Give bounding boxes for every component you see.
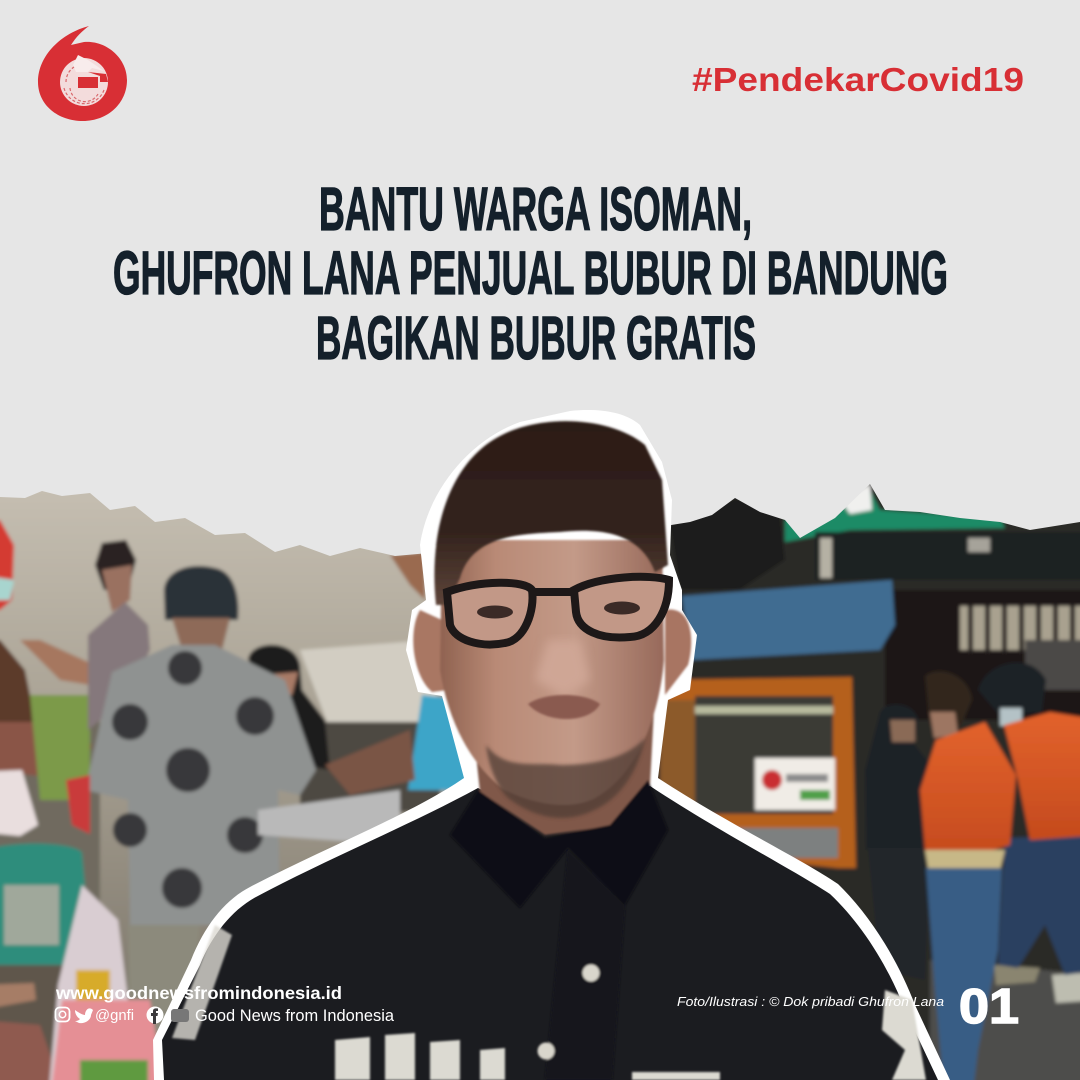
wall highlight bbox=[300, 640, 440, 730]
photo credit: Foto/Ilustrasi : © Dok pribadi Ghufron Lana bbox=[677, 994, 944, 1009]
title: BANTU WARGA ISOMAN, bbox=[319, 175, 752, 243]
icon: youtube bbox=[171, 1009, 189, 1022]
driver 1 jeans bbox=[926, 868, 1002, 1080]
icon: facebook bbox=[146, 1006, 164, 1024]
blue tarp on cart bbox=[682, 580, 895, 660]
lower cart panel bbox=[700, 828, 838, 858]
dark roof bbox=[815, 532, 1080, 580]
icon: twitter bbox=[75, 1008, 93, 1023]
lower left ground and feet bbox=[0, 964, 62, 1054]
face bbox=[440, 540, 664, 805]
icon: instagram bbox=[56, 1008, 70, 1022]
page number: 01 bbox=[959, 980, 1019, 1034]
shirt print bbox=[172, 925, 926, 1080]
social handle: @gnfi bbox=[95, 1007, 134, 1024]
detailed head and body shading bbox=[172, 540, 926, 1080]
driver 2 jeans bbox=[998, 835, 1080, 975]
hashtag: #PendekarCovid19 bbox=[692, 62, 1024, 99]
neck bbox=[470, 690, 655, 835]
shirt bbox=[162, 786, 938, 1080]
man in patterned shirt bbox=[164, 566, 238, 620]
social icons and handles bbox=[56, 1006, 395, 1025]
ears bbox=[413, 610, 448, 692]
portrait: man with glasses bbox=[153, 410, 950, 1080]
dark foliage bbox=[670, 498, 785, 590]
ground bbox=[930, 960, 1080, 1080]
photo: food cart and delivery drivers (right) bbox=[640, 480, 1080, 1080]
green stool bbox=[0, 843, 85, 965]
beard bbox=[486, 738, 645, 818]
website URL: www.goodnewsfromindonesia.id bbox=[55, 983, 342, 1003]
logo: GNFI red swirl emblem bbox=[38, 26, 127, 121]
title bbox=[113, 175, 948, 372]
seated man bbox=[866, 704, 926, 848]
blue shirt person near portrait bbox=[408, 695, 470, 790]
photo: food distribution crowd (left) bbox=[0, 480, 480, 1080]
plastic bag of rice bbox=[46, 882, 130, 1080]
green awning bbox=[785, 490, 1005, 542]
nose and mouth bbox=[535, 640, 590, 697]
eyes bbox=[477, 606, 513, 618]
fence bbox=[885, 590, 1080, 720]
person behind, dark hair bbox=[248, 645, 330, 770]
woman in striped shirt bbox=[95, 540, 136, 590]
channel name: Good News from Indonesia bbox=[195, 1007, 395, 1025]
gofood sticker bbox=[755, 758, 835, 810]
person at left edge: red headscarf bbox=[0, 520, 14, 610]
white cut-out outline bbox=[153, 410, 950, 1080]
collar bbox=[450, 780, 668, 908]
hair bbox=[434, 421, 668, 605]
driver 1 orange jacket bbox=[925, 671, 972, 728]
table bbox=[258, 790, 400, 845]
glasses bbox=[447, 577, 669, 644]
placket bbox=[545, 850, 625, 1080]
driver 2 with helmet and orange jacket bbox=[978, 662, 1046, 716]
title: BAGIKAN BUBUR GRATIS bbox=[316, 304, 756, 372]
wooden cart bbox=[660, 677, 856, 870]
